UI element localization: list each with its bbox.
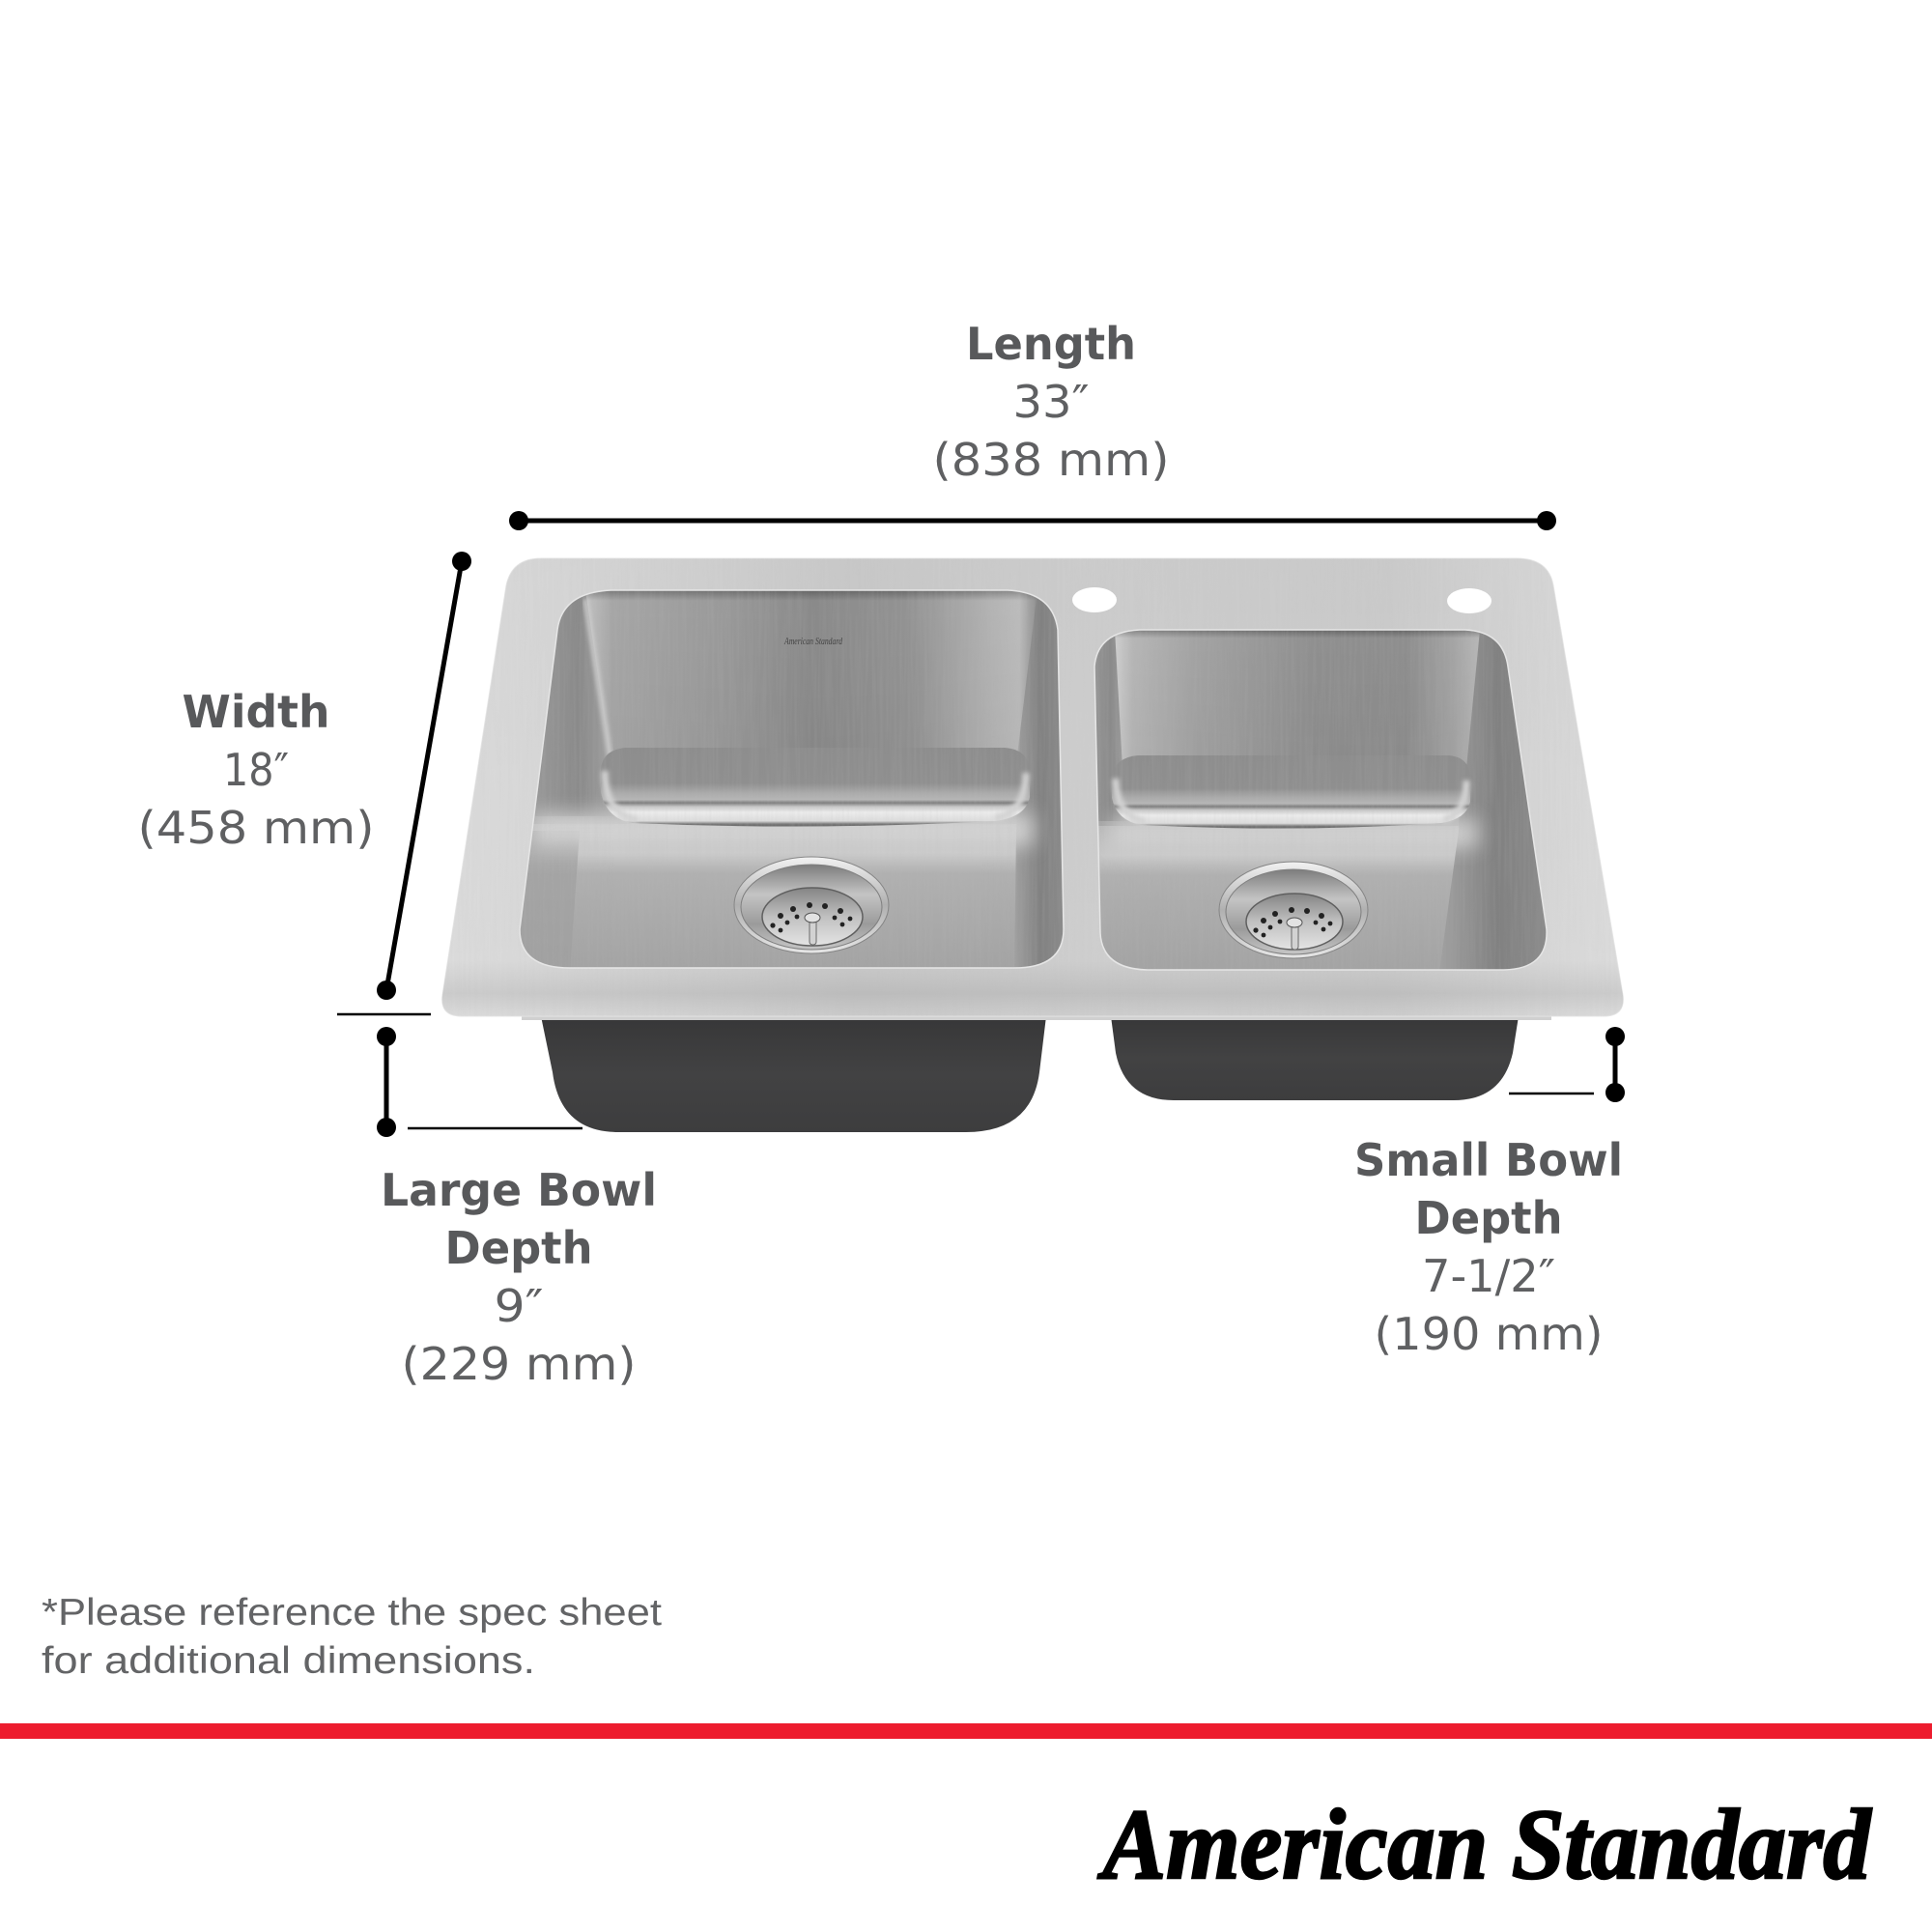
shelf	[1112, 755, 1470, 829]
heading: small bowl depth label	[1354, 1134, 1623, 1360]
large bowl	[512, 584, 1072, 971]
heading: length label: 33″	[1012, 376, 1090, 428]
back wall	[585, 590, 1037, 763]
large bowl underside	[541, 1016, 1046, 1132]
floor	[1099, 826, 1457, 912]
footnote	[42, 1592, 662, 1682]
shelf edge highlight	[605, 771, 1026, 820]
footnote: *Please reference the spec sheet	[42, 1592, 662, 1634]
large bowl rim highlight	[520, 590, 1064, 968]
heading: small bowl depth label: (190 mm)	[1374, 1308, 1604, 1360]
right wall	[1443, 633, 1546, 970]
arrow: small bowl depth dimension	[1509, 1027, 1625, 1102]
bowl brushed texture	[1256, 631, 1499, 838]
illustration: stainless steel double-bowl sink	[440, 558, 1626, 1132]
shelf	[601, 748, 1030, 827]
back wall left crease	[585, 599, 611, 759]
heading: small bowl depth label: 7-1/2″	[1422, 1250, 1555, 1302]
floor	[529, 824, 1016, 896]
shelf edge highlight	[1116, 779, 1466, 822]
left wall	[535, 595, 605, 816]
right wall	[1014, 598, 1063, 967]
heading: large bowl depth label	[381, 1164, 657, 1390]
deck brushed texture	[440, 558, 1626, 1016]
small bowl	[1087, 623, 1555, 976]
faucet hole right	[1447, 588, 1492, 613]
bowl brushed texture	[792, 591, 923, 827]
small bowl drain strainer	[1219, 862, 1368, 958]
left wall	[1095, 636, 1122, 821]
left wall lower shade	[524, 831, 579, 916]
heading: small bowl depth label: Depth	[1414, 1192, 1563, 1244]
back wall	[1115, 630, 1480, 768]
arrow: width dimension line	[377, 552, 471, 1000]
red divider bar	[0, 1723, 1932, 1739]
heading: length label	[933, 318, 1169, 486]
large bowl drain strainer	[734, 857, 889, 953]
heading: small bowl depth label: Small Bowl	[1354, 1134, 1623, 1186]
heading: width label: Width	[182, 686, 330, 738]
sink rim lip	[522, 1014, 1551, 1020]
heading: length label: Length	[966, 318, 1136, 370]
heading: large bowl depth label: Large Bowl	[381, 1164, 657, 1216]
heading: width label: 18″	[223, 744, 289, 796]
faucet hole left	[1072, 587, 1117, 612]
arrow: length dimension line	[509, 511, 1556, 530]
deck vertical shading	[442, 970, 1623, 1010]
small bowl underside	[1111, 1016, 1519, 1100]
small bowl rim highlight	[1094, 630, 1547, 970]
heading: large bowl depth label: (229 mm)	[402, 1338, 636, 1390]
heading: width label	[137, 686, 375, 854]
deck plate	[442, 558, 1623, 1016]
glow above floor	[1111, 819, 1478, 848]
brand logo: American Standard	[1097, 1789, 1872, 1900]
footnote: for additional dimensions.	[42, 1640, 535, 1682]
arrow: large bowl depth dimension	[337, 1014, 582, 1137]
glow above floor	[531, 813, 1034, 846]
small engraved brand mark: American Standard	[783, 637, 843, 647]
heading: large bowl depth label: 9″	[495, 1280, 543, 1332]
heading: width label: (458 mm)	[137, 802, 375, 854]
heading: large bowl depth label: Depth	[444, 1222, 593, 1274]
heading: length label: (838 mm)	[933, 434, 1169, 486]
